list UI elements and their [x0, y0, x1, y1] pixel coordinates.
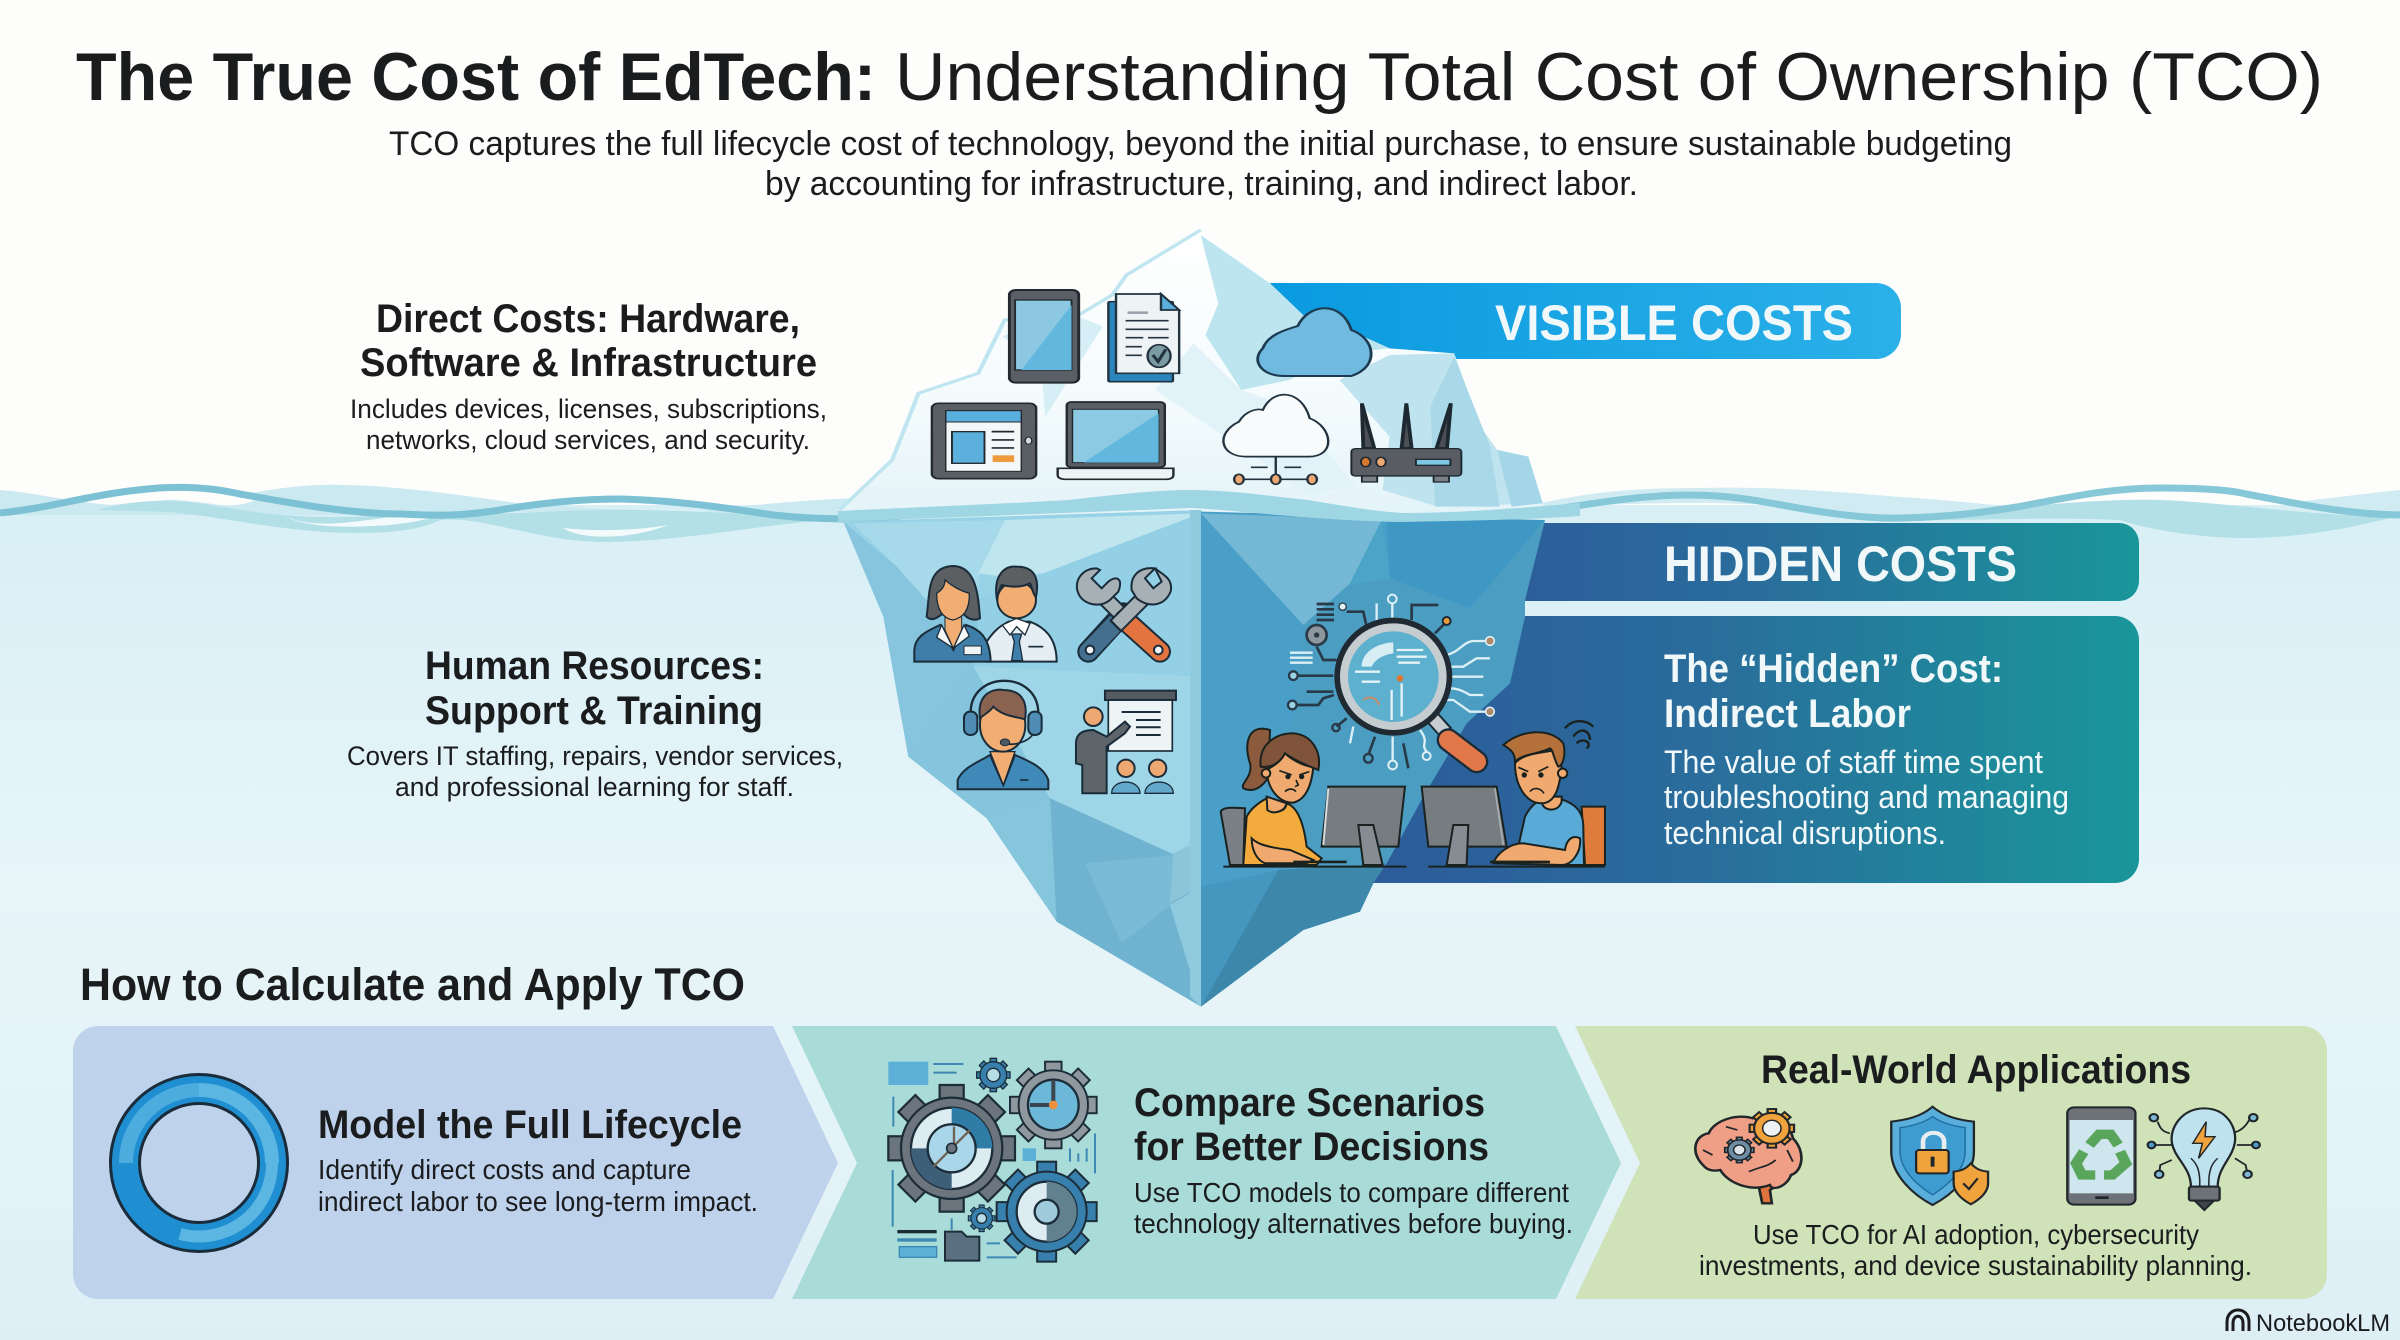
panel: model the full lifecycle	[73, 1026, 838, 1299]
brand: NotebookLM: NotebookLM	[2256, 1310, 2390, 1337]
panel: real-world applications	[1575, 1026, 2327, 1299]
text block: direct costs: Includes devices, licenses, subscriptions,	[350, 394, 827, 424]
section heading: How to Calculate and Apply TCO	[80, 959, 745, 1010]
text block: human resources: Covers IT staffing, repairs, vendor services,	[347, 741, 843, 771]
step description: technology alternatives before buying.	[1134, 1208, 1573, 1239]
panel: hidden costs header	[1450, 523, 2139, 601]
step title: Model the Full Lifecycle	[318, 1103, 742, 1147]
icon: support agent headset	[958, 681, 1048, 789]
water surface waves	[0, 485, 2400, 542]
text block: direct costs: Direct Costs: Hardware,	[376, 297, 800, 341]
step title: Real-World Applications	[1761, 1048, 2191, 1092]
icon: light bulb with circuits	[2148, 1108, 2260, 1210]
icon: trainer with board	[1076, 691, 1176, 793]
step description: investments, and device sustainability planning.	[1699, 1250, 2252, 1281]
icon: network cloud	[1223, 395, 1328, 484]
subtitle	[389, 125, 2012, 203]
icon: security shield	[1891, 1107, 1988, 1205]
step title	[1134, 1081, 1489, 1169]
iceberg below water right half	[1190, 510, 1545, 1007]
icon: brain with gears	[1695, 1109, 1801, 1203]
icon: frustrated girl at computer	[1221, 729, 1407, 867]
text block: human resources: Human Resources:	[425, 644, 764, 688]
iceberg below water left half	[843, 510, 1202, 1007]
icons: human resources group	[914, 566, 1176, 793]
icon: lifecycle ring	[125, 1089, 273, 1237]
text block: indirect labor: technical disruptions.	[1664, 815, 1946, 851]
text block: indirect labor: The “Hidden” Cost:	[1664, 647, 2003, 691]
step description: Use TCO models to compare different	[1134, 1177, 1569, 1208]
text block: human resources: and professional learning for staff.	[395, 772, 794, 802]
icon: staff people	[914, 566, 1057, 662]
step description	[1699, 1219, 2252, 1281]
icon: tablet	[1009, 290, 1079, 383]
subtitle: TCO captures the full lifecycle cost of technology, beyond the initial purchase, to ensure sustainable budgeting	[389, 125, 2012, 163]
icon: document with check	[1108, 294, 1179, 382]
step title: Compare Scenarios	[1134, 1081, 1485, 1125]
background: sky	[0, 0, 2400, 520]
text block: direct costs: networks, cloud services, and security.	[366, 425, 810, 455]
text block: indirect labor	[1664, 647, 2069, 851]
text block: direct costs	[350, 297, 827, 455]
text block: human resources: Support & Training	[425, 689, 763, 733]
icon: magnifier with circuits	[1288, 595, 1494, 769]
icon: router	[1351, 403, 1461, 482]
text block: direct costs: Software & Infrastructure	[360, 341, 817, 385]
step description: Use TCO for AI adoption, cybersecurity	[1753, 1219, 2199, 1250]
title: The True Cost of EdTech:	[76, 39, 876, 115]
step description: indirect labor to see long-term impact.	[318, 1186, 758, 1217]
subtitle: by accounting for infrastructure, training, and indirect labor.	[765, 165, 1638, 203]
label: visible costs: VISIBLE COSTS	[1495, 295, 1853, 351]
title: Understanding Total Cost of Ownership (TCO)	[895, 39, 2323, 115]
icon: gears and dials	[888, 1058, 1097, 1262]
banner: visible costs	[1269, 283, 1901, 359]
icon: crossed wrenches	[1077, 568, 1171, 654]
icon: frustrated boy at computer	[1422, 721, 1605, 867]
text block: human resources	[347, 644, 843, 802]
icons: indirect labor group	[1221, 595, 1605, 867]
icon: laptop	[1058, 402, 1173, 479]
text block: indirect labor: The value of staff time spent	[1664, 744, 2043, 780]
text block: indirect labor: Indirect Labor	[1664, 692, 1911, 736]
title	[76, 39, 2323, 115]
panel: indirect labor	[1350, 616, 2139, 883]
icon: browser tablet	[932, 403, 1036, 479]
step title: for Better Decisions	[1134, 1125, 1489, 1169]
icon: blue cloud	[1258, 308, 1371, 376]
iceberg above water	[840, 230, 1543, 517]
step description	[318, 1154, 758, 1217]
step description	[1134, 1177, 1573, 1239]
iceberg illustration	[838, 230, 1580, 1007]
text block: indirect labor: troubleshooting and managing	[1664, 779, 2069, 815]
icon: phone with recycling	[2067, 1107, 2135, 1205]
label: hidden costs: HIDDEN COSTS	[1664, 536, 2017, 592]
step description: Identify direct costs and capture	[318, 1154, 691, 1185]
background: sea	[0, 505, 2400, 1340]
waterline over iceberg	[838, 490, 1580, 522]
panel: compare scenarios	[792, 1026, 1621, 1299]
